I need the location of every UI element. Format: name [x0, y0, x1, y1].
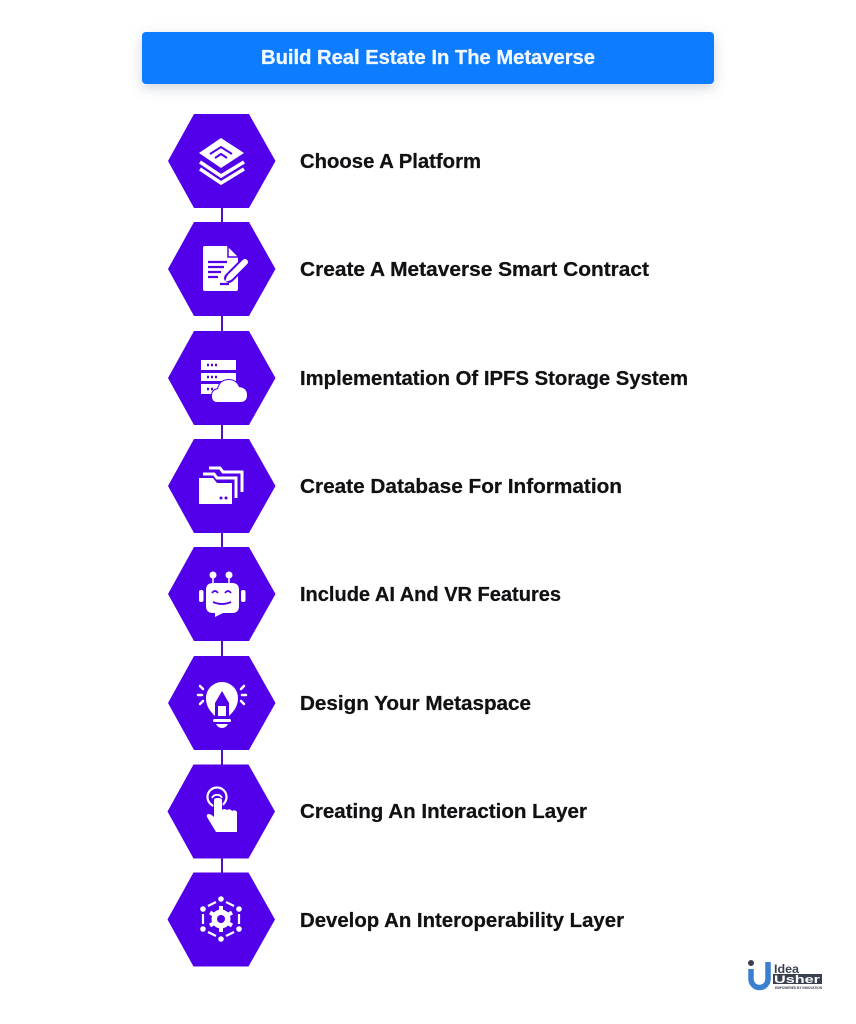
icon: folders — [199, 468, 242, 504]
timeline connector — [221, 200, 223, 880]
step 5: ai and vr — [168, 547, 561, 641]
icon: gear network — [200, 896, 242, 942]
step 4: database: Create Database For Information — [300, 476, 622, 498]
step 6: design metaspace — [168, 656, 531, 750]
logo: idea usher: Usher — [774, 974, 821, 986]
logo: idea usher: EMPOWERED BY INNOVATION — [775, 986, 822, 990]
icon: robot — [199, 572, 246, 617]
step 8: interoperability layer — [168, 872, 624, 966]
title banner — [142, 32, 714, 84]
step 2: smart contract — [168, 222, 649, 316]
step 3: ipfs storage — [168, 331, 688, 425]
step 1: choose a platform: Choose A Platform — [300, 151, 481, 173]
icon: document and pen — [203, 246, 245, 291]
step 8: interoperability layer: Develop An Interoperability Layer — [300, 910, 624, 932]
icon: server and cloud — [201, 360, 247, 402]
logo: idea usher — [748, 960, 822, 990]
icon: tapping hand — [207, 788, 237, 832]
step 7: interaction layer: Creating An Interaction Layer — [300, 801, 587, 823]
step 5: ai and vr: Include AI And VR Features — [300, 584, 561, 606]
step 3: ipfs storage: Implementation Of IPFS Storage System — [300, 368, 688, 390]
step 4: database — [168, 439, 622, 533]
step 1: choose a platform — [168, 114, 481, 208]
step 6: design metaspace: Design Your Metaspace — [300, 693, 531, 715]
icon: stacked layers — [199, 138, 244, 183]
icon: light bulb with pencil — [198, 682, 246, 728]
logo: idea usher: Idea — [774, 962, 799, 976]
step 7: interaction layer — [168, 764, 587, 858]
step 2: smart contract: Create A Metaverse Smart Contract — [300, 259, 649, 281]
title banner: Build Real Estate In The Metaverse — [261, 46, 595, 69]
